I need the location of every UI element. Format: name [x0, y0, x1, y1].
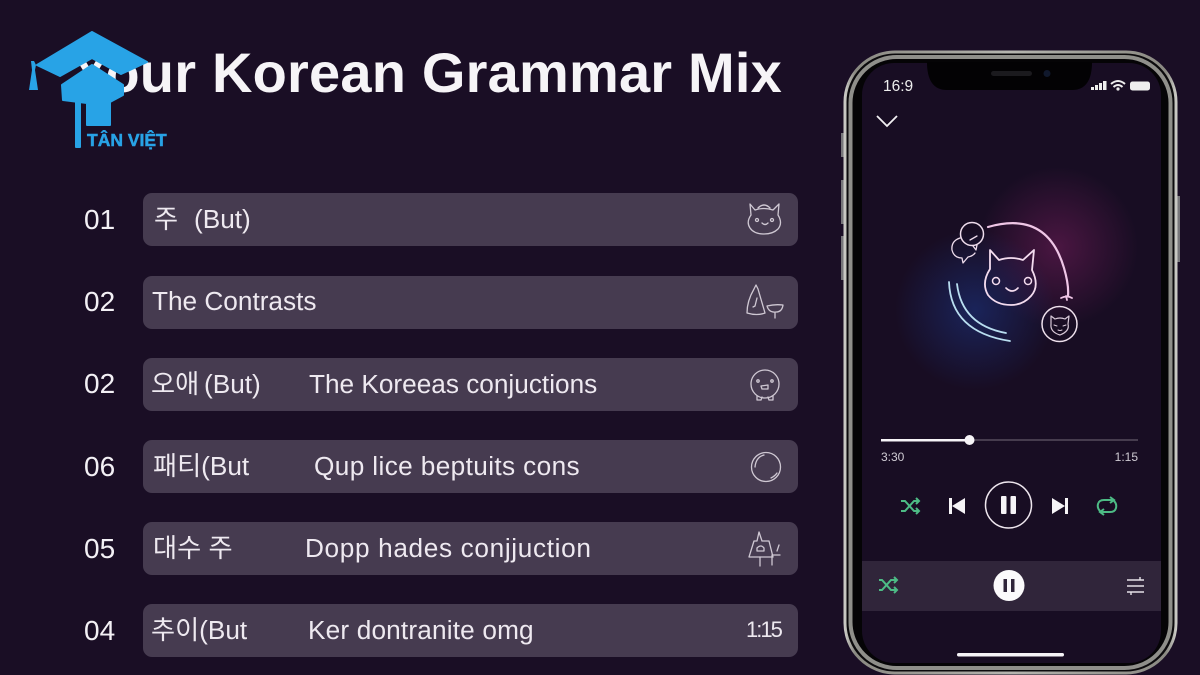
row number 06: 06: [84, 451, 115, 482]
row 6: 추이(But: [151, 615, 247, 645]
row 2: [143, 276, 798, 329]
row number 02: 02: [84, 286, 115, 317]
album art: neon cat: [949, 222, 1077, 342]
icon: bell with stand: [748, 531, 781, 567]
icon: cat: [748, 203, 782, 235]
progress bar: [881, 435, 1138, 445]
bottom bar: [862, 561, 1161, 611]
row 2: The Contrasts: [152, 286, 316, 316]
row number 05: 05: [84, 533, 115, 564]
row 6: Ker dontranite omg: [308, 615, 534, 645]
chevron down: [877, 116, 897, 126]
elapsed time: 3:30: [881, 450, 905, 464]
status icons: [1091, 81, 1150, 91]
row 3: 오애: [151, 369, 199, 399]
duration label: 1:15: [746, 617, 781, 642]
row 5: Dopp hades conjjuction: [305, 533, 592, 563]
row 4: Qup lice beptuits cons: [314, 451, 580, 481]
row 4: [143, 440, 798, 493]
row number 02: 02: [84, 368, 115, 399]
pause button: [986, 482, 1032, 528]
row 3: The Koreeas conjuctions: [309, 369, 597, 399]
repeat icon: [1098, 497, 1116, 515]
logo: Tan Viet: TÂN VIỆT: [87, 129, 167, 150]
next icon: [1052, 498, 1068, 514]
row 5: 대수 주: [153, 533, 233, 563]
total time: 1:15: [1115, 450, 1138, 464]
notch: [927, 62, 1092, 90]
row 1: [143, 193, 798, 246]
shuffle icon: [901, 498, 919, 514]
row 4: 패티(But: [153, 451, 249, 481]
album art: neon glow: [895, 167, 1138, 390]
row number 04: 04: [84, 615, 115, 646]
icon: round bird: [750, 369, 780, 401]
phone body: [845, 52, 1176, 673]
row 1: (But): [194, 204, 251, 234]
title: Your Korean Grammar Mix: [72, 41, 782, 104]
previous icon: [949, 498, 965, 514]
home indicator: [957, 653, 1064, 656]
row 5: [143, 522, 798, 575]
row 1: 주: [154, 204, 178, 234]
phone side buttons: [841, 133, 1180, 280]
row number 01: 01: [84, 204, 115, 235]
icon: metronome and glass: [746, 284, 784, 319]
icon: ring: [750, 452, 782, 482]
row 3: [143, 358, 798, 411]
row 3: (But): [204, 369, 261, 399]
bottom shuffle icon: [879, 577, 897, 593]
status time: 16:9: [883, 78, 913, 95]
bottom pause button: [994, 570, 1024, 601]
row 6: [143, 604, 798, 657]
equalizer icon: [1127, 577, 1144, 595]
logo: Tan Viet: [29, 31, 167, 150]
